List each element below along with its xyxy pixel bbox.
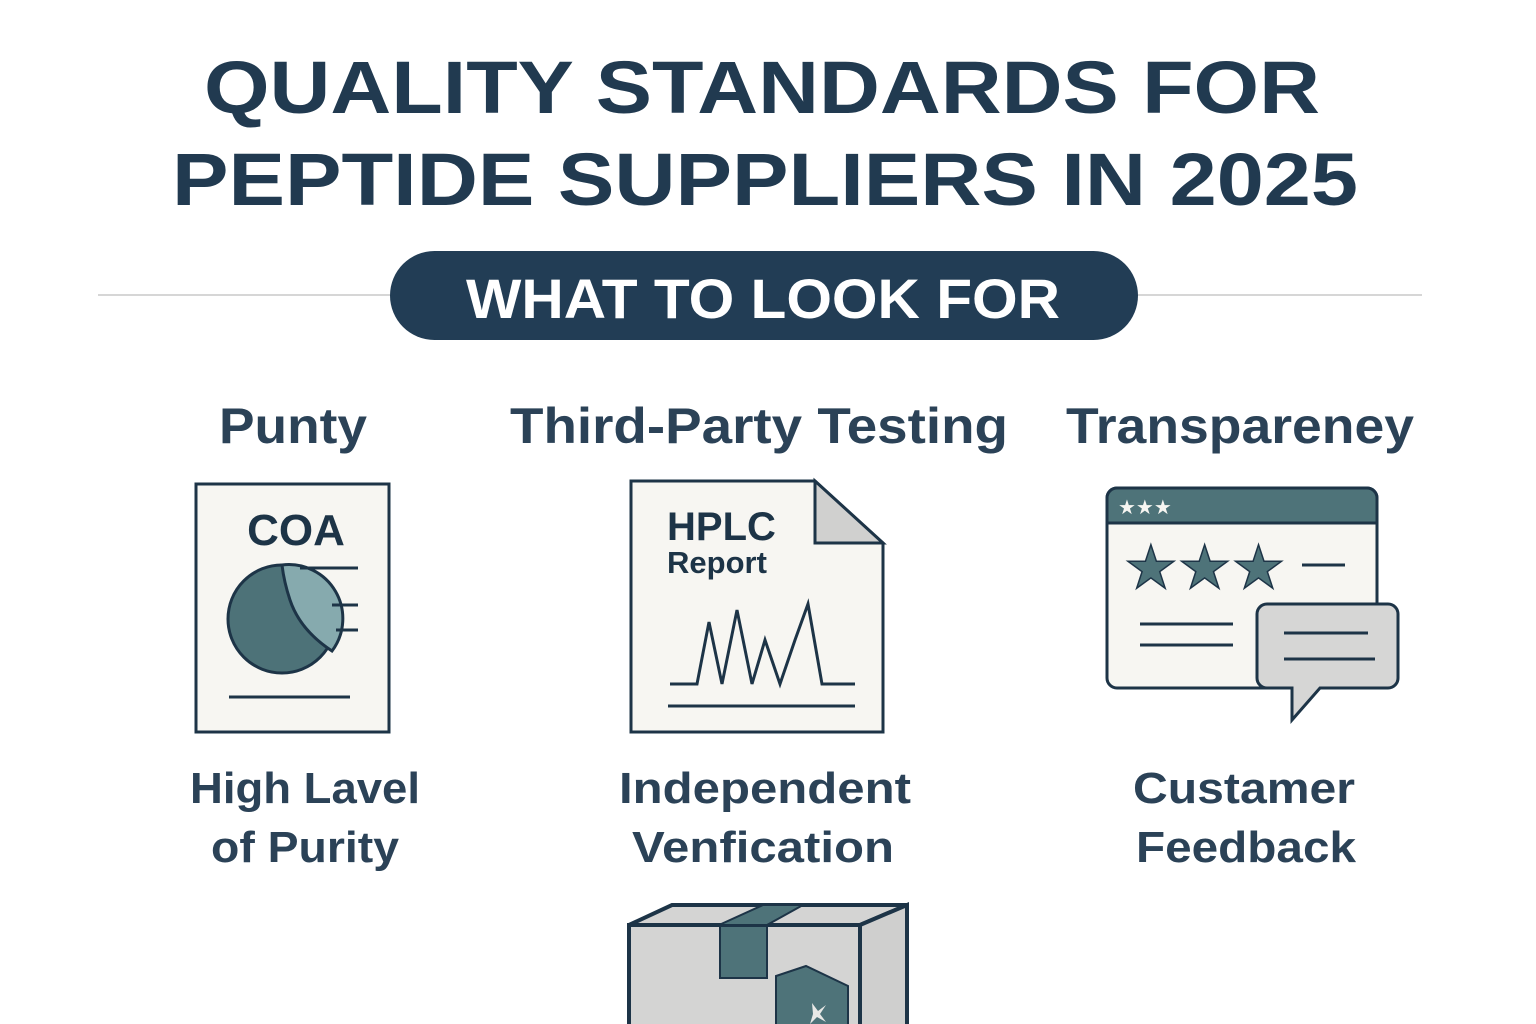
icon: customer reviews: ★★★ — [1118, 497, 1172, 519]
icon: customer reviews — [1107, 488, 1398, 720]
icon: HPLC report — [631, 481, 883, 732]
icon: HPLC report: Report — [667, 545, 767, 580]
label: customer feedback: Feedback — [1136, 823, 1357, 872]
label: high level of purity: High Lavel — [190, 764, 420, 813]
title — [172, 46, 1358, 221]
title: QUALITY STANDARDS FOR — [204, 46, 1320, 129]
title: PEPTIDE SUPPLIERS IN 2025 — [172, 138, 1358, 221]
icon: COA document: COA — [247, 506, 345, 555]
label: high level of purity — [190, 764, 420, 872]
banner: what to look for — [390, 251, 1138, 340]
label: independent verification: Independent — [619, 764, 911, 813]
label: independent verification — [619, 764, 911, 872]
heading: purity: Punty — [219, 398, 367, 454]
label: independent verification: Venfication — [632, 823, 894, 872]
label: high level of purity: of Purity — [211, 823, 400, 872]
label: customer feedback: Custamer — [1133, 764, 1355, 813]
heading: third-party testing: Third-Party Testing — [510, 398, 1008, 454]
icon: COA document — [196, 484, 389, 732]
heading: transparency: Transpareney — [1066, 398, 1414, 454]
banner: what to look for: WHAT TO LOOK FOR — [466, 267, 1060, 330]
icon: customer reviews: ★★★ — [1124, 534, 1285, 601]
icon: sealed box — [629, 905, 907, 1024]
icon: HPLC report: HPLC — [667, 505, 776, 549]
label: customer feedback — [1133, 764, 1357, 872]
